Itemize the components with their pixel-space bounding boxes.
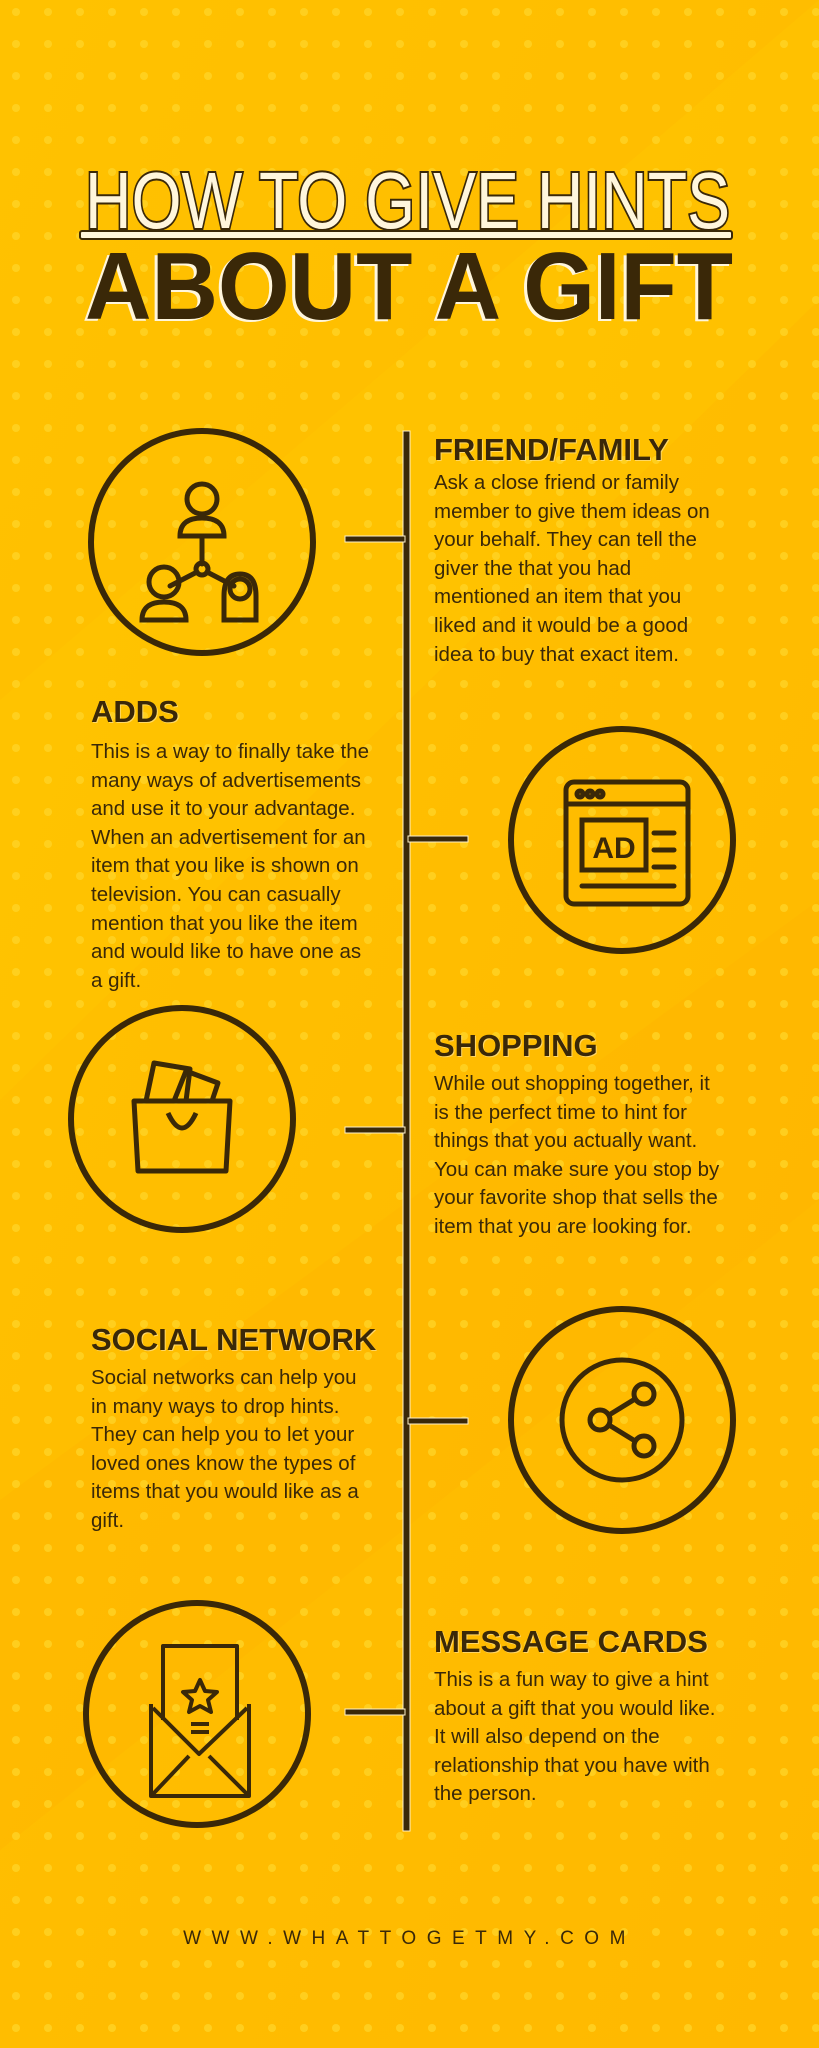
text: item that you like is shown on [91,854,359,877]
icon: envelope card [83,1600,311,1828]
text: While out shopping together, it [434,1072,710,1095]
text: MESSAGE CARDS [434,1624,708,1659]
text: your favorite shop that sells the [434,1186,718,1209]
text: shopping [434,1028,720,1238]
text: ADDS [91,694,179,729]
text: mention that you like the item [91,912,358,935]
text: You can make sure you stop by [434,1158,719,1181]
text: Social networks can help you [91,1366,357,1389]
text: about a gift that you would like. [434,1697,716,1720]
text: This is a way to finally take the [91,740,369,763]
text: loved ones know the types of [91,1452,355,1475]
text: liked and it would be a good [434,614,688,637]
text: social network [91,1322,377,1532]
text: message cards [434,1624,716,1805]
text: member to give them ideas on [434,500,710,523]
text: a gift. [91,969,141,992]
title: ABOUT A GIFT [82,235,730,340]
text: and would like to have one as [91,940,361,963]
text: FRIEND/FAMILY [434,432,669,467]
text: the person. [434,1782,537,1805]
text: SOCIAL NETWORK [91,1322,376,1357]
icon: family [88,428,316,656]
text: items that you would like as a [91,1480,359,1503]
text: in many ways to drop hints. [91,1395,339,1418]
icon: shopping bag [68,1005,296,1233]
text: This is a fun way to give a hint [434,1668,709,1691]
text: television. You can casually [91,883,341,906]
text: gift. [91,1509,124,1532]
text: your behalf. They can tell the [434,528,697,551]
text: Ask a close friend or family [434,471,679,494]
icon: share [508,1306,736,1534]
title [79,156,733,340]
text: and use it to your advantage. [91,797,355,820]
text: It will also depend on the [434,1725,660,1748]
icon: ad window: AD [592,832,636,865]
text: mentioned an item that you [434,585,681,608]
text: friend/family [434,432,710,666]
title: ABOUT A GIFT [85,233,733,340]
text: things that you actually want. [434,1129,697,1152]
text: adds [91,694,369,992]
text: is the perfect time to hint for [434,1101,687,1124]
text: idea to buy that exact item. [434,643,679,666]
text: item that you are looking for. [434,1215,692,1238]
text: They can help you to let your [91,1423,354,1446]
text: SHOPPING [434,1028,598,1063]
text: When an advertisement for an [91,826,366,849]
text: many ways of advertisements [91,769,361,792]
text: relationship that you have with [434,1754,710,1777]
icon: ad window [508,726,736,954]
footer url: WWW.WHATTOGETMY.COM [183,1928,636,1949]
text: giver the that you had [434,557,631,580]
